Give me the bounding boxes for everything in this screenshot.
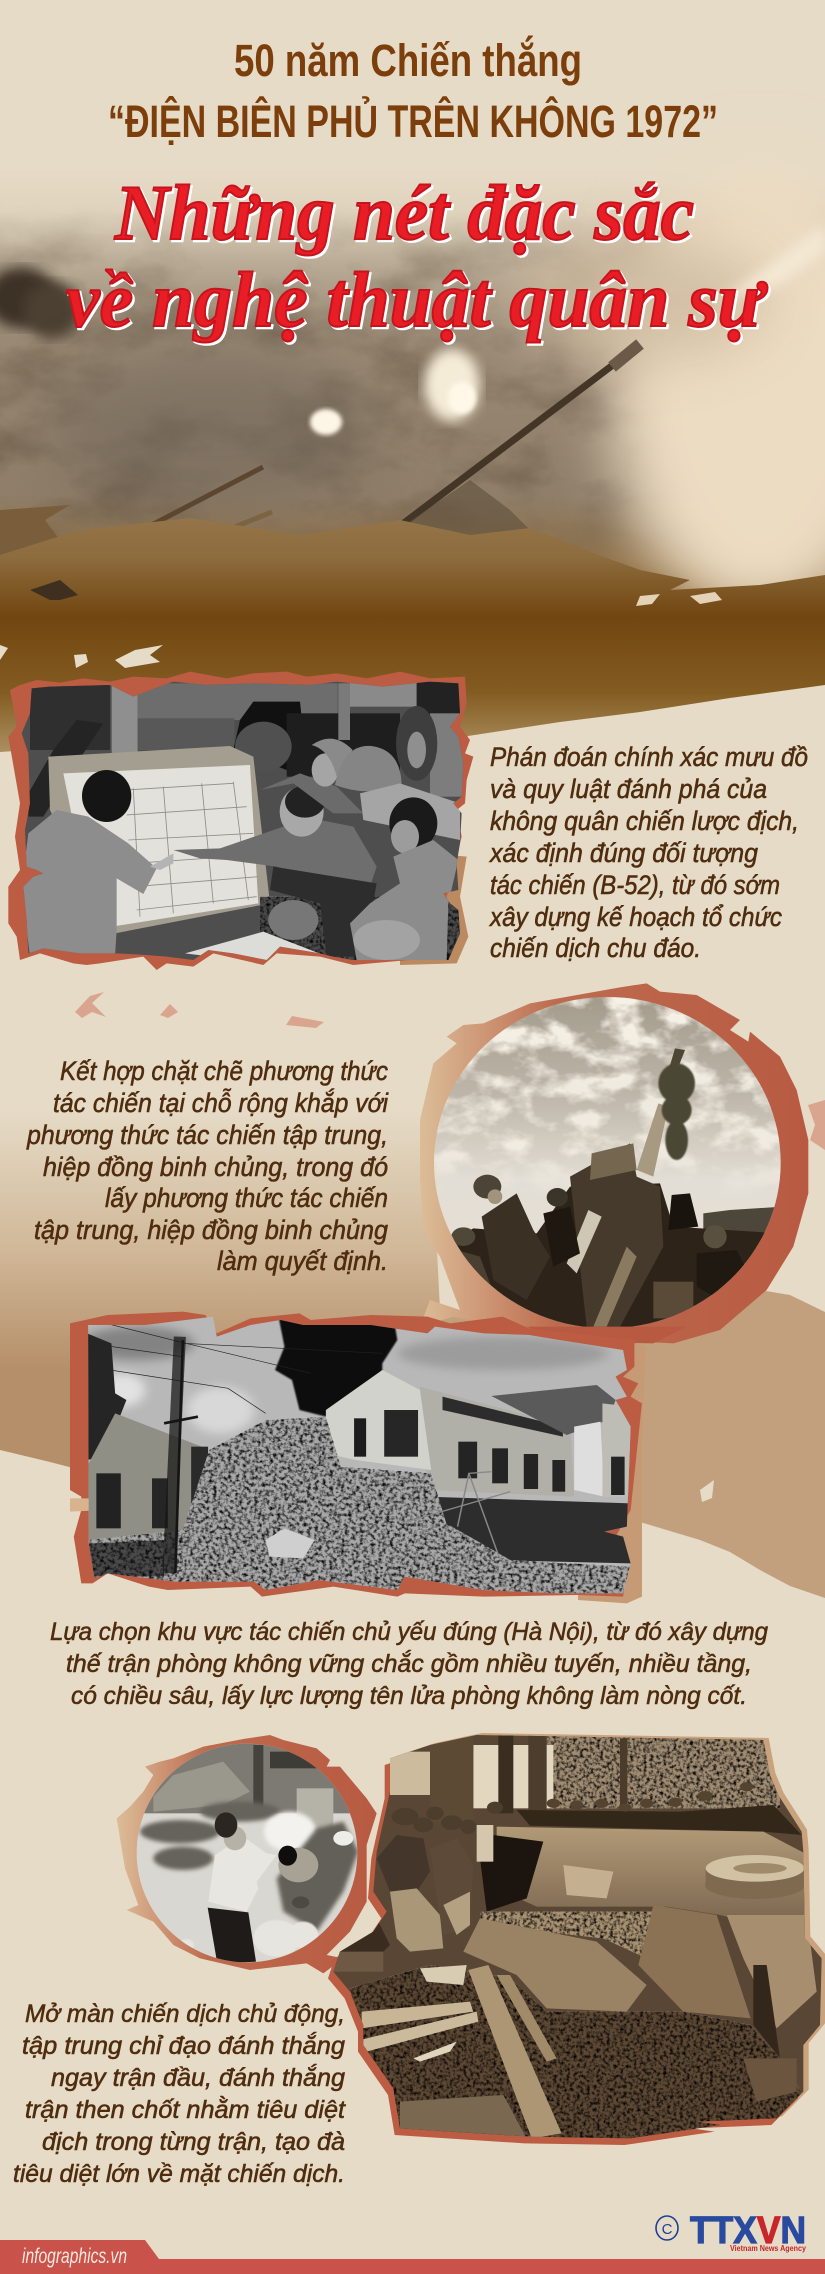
photo content [330,1732,825,2142]
foliage [658,1063,695,1160]
steel strips [360,1965,478,2062]
red headline: Những nét đặc sắc [116,171,696,258]
text block 4: tiêu diệt lớn về mặt chiến dịch. [13,2160,345,2188]
text block 1: không quân chiến lược địch, [490,806,799,836]
text block 1: tác chiến (B-52), từ đó sớm [490,870,780,900]
electric pylon [164,1337,198,1573]
ruin [326,1370,431,1470]
photo content [133,1738,363,1968]
text block 1 [488,742,808,963]
TTXVN wordmark: TTXVN [690,2210,806,2252]
title [108,35,718,147]
smoke light on the right [510,160,825,620]
text block 2: phương thức tác chiến tập trung, [26,1120,388,1150]
text block 1: và quy luật đánh phá của [490,774,767,804]
man pointing [173,786,377,957]
TTXVN logo [656,2210,806,2253]
soldiers [330,1802,503,1972]
red headline [66,169,770,345]
footer bar [0,2240,825,2274]
bucket [278,1846,318,1908]
gun barrel [637,1103,668,1177]
text block 4: địch trong từng trận, tạo đà [42,2128,345,2156]
copyright symbol: C [662,2221,673,2238]
photo 4: woman with water bucket [117,1735,377,1973]
text block 2: Kết hợp chặt chẽ phương thức [60,1056,388,1086]
text block 4: ngay trận đầu, đánh thắng [51,2063,345,2092]
text block 2: làm quyết định. [217,1246,388,1276]
ragged ring frame [420,983,808,1343]
map board [48,746,270,935]
soldiers and gun mass [454,1183,764,1327]
red headline: Những nét đặc sắc [114,169,694,256]
red headline: về nghệ thuật quân sự [68,258,770,345]
photo 2: anti-aircraft gun in round frame [420,983,808,1343]
text block 4: Mở màn chiến dịch chủ động, [25,2000,345,2028]
text block 3: có chiều sâu, lấy lực lượng tên lửa phòng không làm nòng cốt. [71,1682,747,1710]
cream flakes in the brown band [0,645,163,668]
text block 2: hiệp đồng binh chủng, trong đó [43,1152,388,1182]
man on the left [22,770,173,957]
torn frame [70,1312,646,1603]
footer website: infographics.vn [22,2245,127,2268]
text block 2: tập trung, hiệp đồng binh chủng [34,1215,388,1245]
torn brown ground [0,518,825,760]
photo 1: officers studying a map [8,672,473,970]
wreck rim with crowd [517,1782,802,1835]
text block 4: tập trung chỉ đạo đánh thắng [22,2031,345,2060]
woman [208,1812,277,1964]
torn frame [328,1733,825,2145]
title line one: 50 năm Chiến thắng [234,35,582,86]
ragged ring frame [117,1735,377,1973]
text block 1: chiến dịch chu đáo. [490,933,701,963]
lower debris [350,1965,803,2140]
sepia ground bottom-right [743,2058,797,2102]
artillery barrels [0,344,640,590]
flowers [179,1920,318,1957]
gunners [451,1175,748,1327]
text block 3 [50,1618,768,1710]
shell [567,1210,602,1273]
black smoke [275,1318,397,1417]
main facade [420,1387,574,1497]
text block 2: lấy phương thức tác chiến [105,1183,388,1213]
dark smoke at upper left [0,268,380,510]
text block 1: xác định đúng đối tượng [488,838,758,868]
text block 2 [26,1056,389,1276]
photo content [81,1317,634,1597]
red headline: về nghệ thuật quân sự [66,256,768,343]
young man at right [350,797,458,960]
photo 3: bombed building [70,1312,646,1603]
photo content [17,677,467,967]
text block 3: Lựa chọn khu vực tác chiến chủ yếu đúng (Hà Nội), từ đó xây dựng [50,1618,768,1646]
photo 5: B-52 wreckage [328,1732,825,2145]
text block 3: thế trận phòng không vững chắc gồm nhiều tuyến, nhiều tầng, [66,1649,752,1678]
text block 4: trận then chốt nhằm tiêu diệt [25,2095,346,2124]
agency tagline: Vietnam News Agency [730,2244,806,2253]
ladder beam [468,1965,562,2138]
mid debris and sheets [480,1912,652,1956]
text block 1: xây dựng kế hoạch tổ chức [488,902,782,932]
photo content [430,993,783,1333]
photo 3 overlap sliver [527,1327,687,1343]
engine ring [705,1855,805,1899]
text block 4 [13,2000,346,2188]
copyright symbol [656,2216,678,2240]
torn frame [8,672,473,970]
left tree and building [87,1333,126,1460]
text block 2: tác chiến tại chỗ rộng khắp với [53,1087,389,1118]
torn cream edge [440,685,825,770]
fuselage [496,1826,805,1922]
helmeted soldiers [260,739,460,840]
hero war photo [0,160,825,780]
shell bursts [310,349,480,435]
